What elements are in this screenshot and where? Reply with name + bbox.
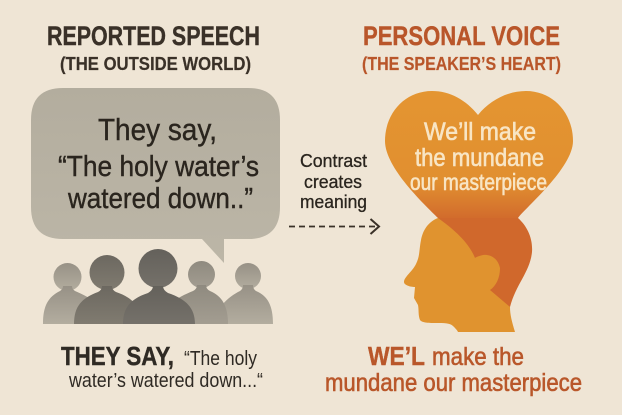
caption: we'll make xyxy=(325,341,582,397)
heart text: the mundane xyxy=(415,144,544,172)
speech bubble xyxy=(31,88,280,263)
heart text xyxy=(410,118,547,195)
contrast label xyxy=(300,151,367,212)
heading: reported speech xyxy=(47,21,260,74)
caption: they say: THEY SAY, xyxy=(61,341,174,371)
caption: they say xyxy=(61,341,263,392)
caption: we'll make: make the xyxy=(432,343,524,371)
contrast label: Contrast xyxy=(300,151,367,171)
caption: they say: water’s watered down...“ xyxy=(68,370,263,392)
person 2 xyxy=(74,255,140,324)
icon: head profile xyxy=(404,218,515,332)
head and heart xyxy=(385,91,573,332)
bubble quote text: watered down..” xyxy=(67,183,253,215)
person 5 xyxy=(222,263,273,324)
person 1 xyxy=(43,263,92,324)
heading: personal voice: PERSONAL VOICE xyxy=(363,21,560,51)
heart text: We’ll make xyxy=(424,118,536,146)
heading: reported speech: (THE OUTSIDE WORLD) xyxy=(60,53,251,74)
heart text: our masterpiece xyxy=(410,169,547,195)
heading: personal voice: (THE SPEAKER’S HEART) xyxy=(362,53,561,74)
bubble quote text: “The holy water’s xyxy=(58,151,259,183)
contrast label: meaning xyxy=(300,192,367,212)
person 4 xyxy=(170,261,228,324)
crowd of people xyxy=(43,249,273,324)
caption: we'll make: mundane our masterpiece xyxy=(325,369,582,397)
bubble quote text: They say, xyxy=(98,112,217,147)
caption: we'll make: WE’L xyxy=(368,341,425,371)
arrow: dashed xyxy=(289,219,379,234)
bubble quote text xyxy=(58,112,259,215)
contrast label: creates xyxy=(304,172,362,192)
heading: reported speech: REPORTED SPEECH xyxy=(47,21,260,51)
icon: hair xyxy=(438,218,532,307)
heading: personal voice xyxy=(362,21,561,74)
icon: heart xyxy=(385,91,573,226)
caption: they say: “The holy xyxy=(184,348,257,370)
person 3 xyxy=(123,249,195,324)
